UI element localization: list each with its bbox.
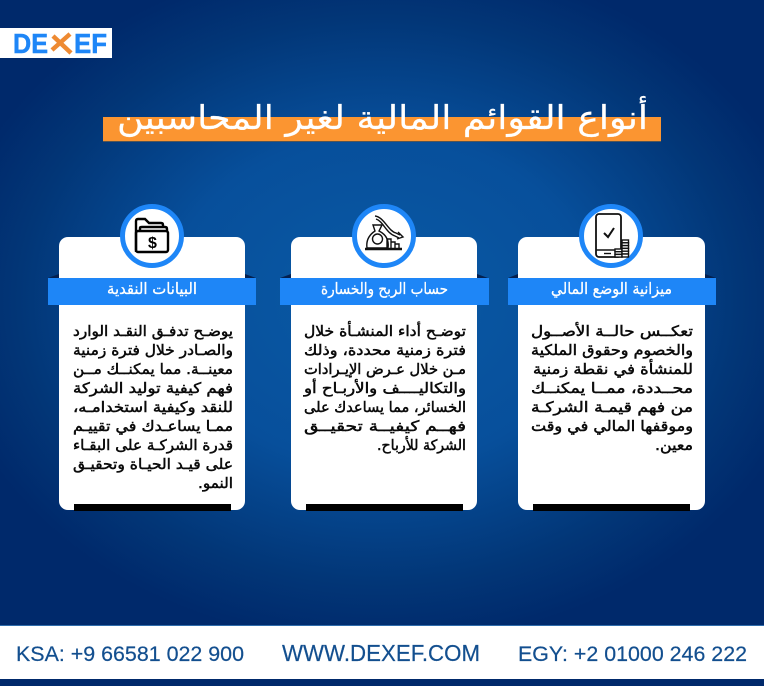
text: من فهم قيمـة الشركـة	[531, 400, 693, 416]
text: وموقفها المالي في وقت	[531, 419, 693, 435]
panel: cash flow statement	[48, 204, 256, 511]
contact: KSA phone: KSA: +9 66581 022 900	[16, 643, 244, 666]
title banner	[103, 117, 661, 141]
text: قدرة الشركـة على البقـاء	[73, 438, 233, 454]
text: فترة زمنية محددة، وذلك	[304, 343, 466, 359]
text: الشركة للأرباح.	[377, 436, 466, 454]
logo: DEXEF	[0, 28, 112, 58]
text: للنقد وكيفية استخدامـه،	[73, 400, 233, 416]
text: معينــة. مما يمكنــك مــن	[73, 362, 233, 378]
text: فهــم كيفيــة تحقيــق	[304, 419, 466, 435]
text: مـن خلال عـرض الإيـرادات	[304, 362, 466, 378]
text: والتكاليــــف والأربـاح أو	[303, 378, 466, 397]
text: حساب الربح والخسارة	[321, 280, 448, 299]
text: البيانات النقدية	[107, 280, 197, 298]
text: $	[148, 235, 157, 252]
footer band	[0, 626, 764, 679]
text: معين.	[655, 438, 693, 454]
text: النمو.	[198, 476, 233, 492]
text: على قيـد الحيـاة وتحقيـق	[73, 457, 233, 473]
panel: income statement	[280, 204, 489, 511]
contact: website: WWW.DEXEF.COM	[282, 640, 480, 666]
text: ميزانية الوضع المالي	[551, 280, 672, 299]
panel: balance sheet	[508, 204, 716, 511]
text: يوضـح تدفـق النقـد الوارد	[73, 324, 233, 340]
text: والخصوم وحقوق الملكية	[531, 343, 693, 359]
contact: EGY phone: EGY: +2 01000 246 222	[518, 643, 747, 666]
title: أنواع القوائم المالية لغير المحاسبين	[117, 96, 648, 137]
text: تعكــس حالــة الأصــول	[531, 322, 693, 340]
text: والصـادر خلال فترة زمنية	[73, 343, 233, 359]
text: محــددة، ممــا يمكنــك	[531, 381, 693, 397]
text: للمنشأة في نقطة زمنية	[533, 359, 693, 378]
text: الخسائر، مما يساعدك على	[304, 400, 466, 416]
text: ممـا يساعـدك في تقييـم	[73, 419, 233, 435]
text: توضـح أداء المنشـأة خلال	[304, 321, 466, 340]
text: فهم كيفية توليد الشركة	[73, 381, 233, 397]
